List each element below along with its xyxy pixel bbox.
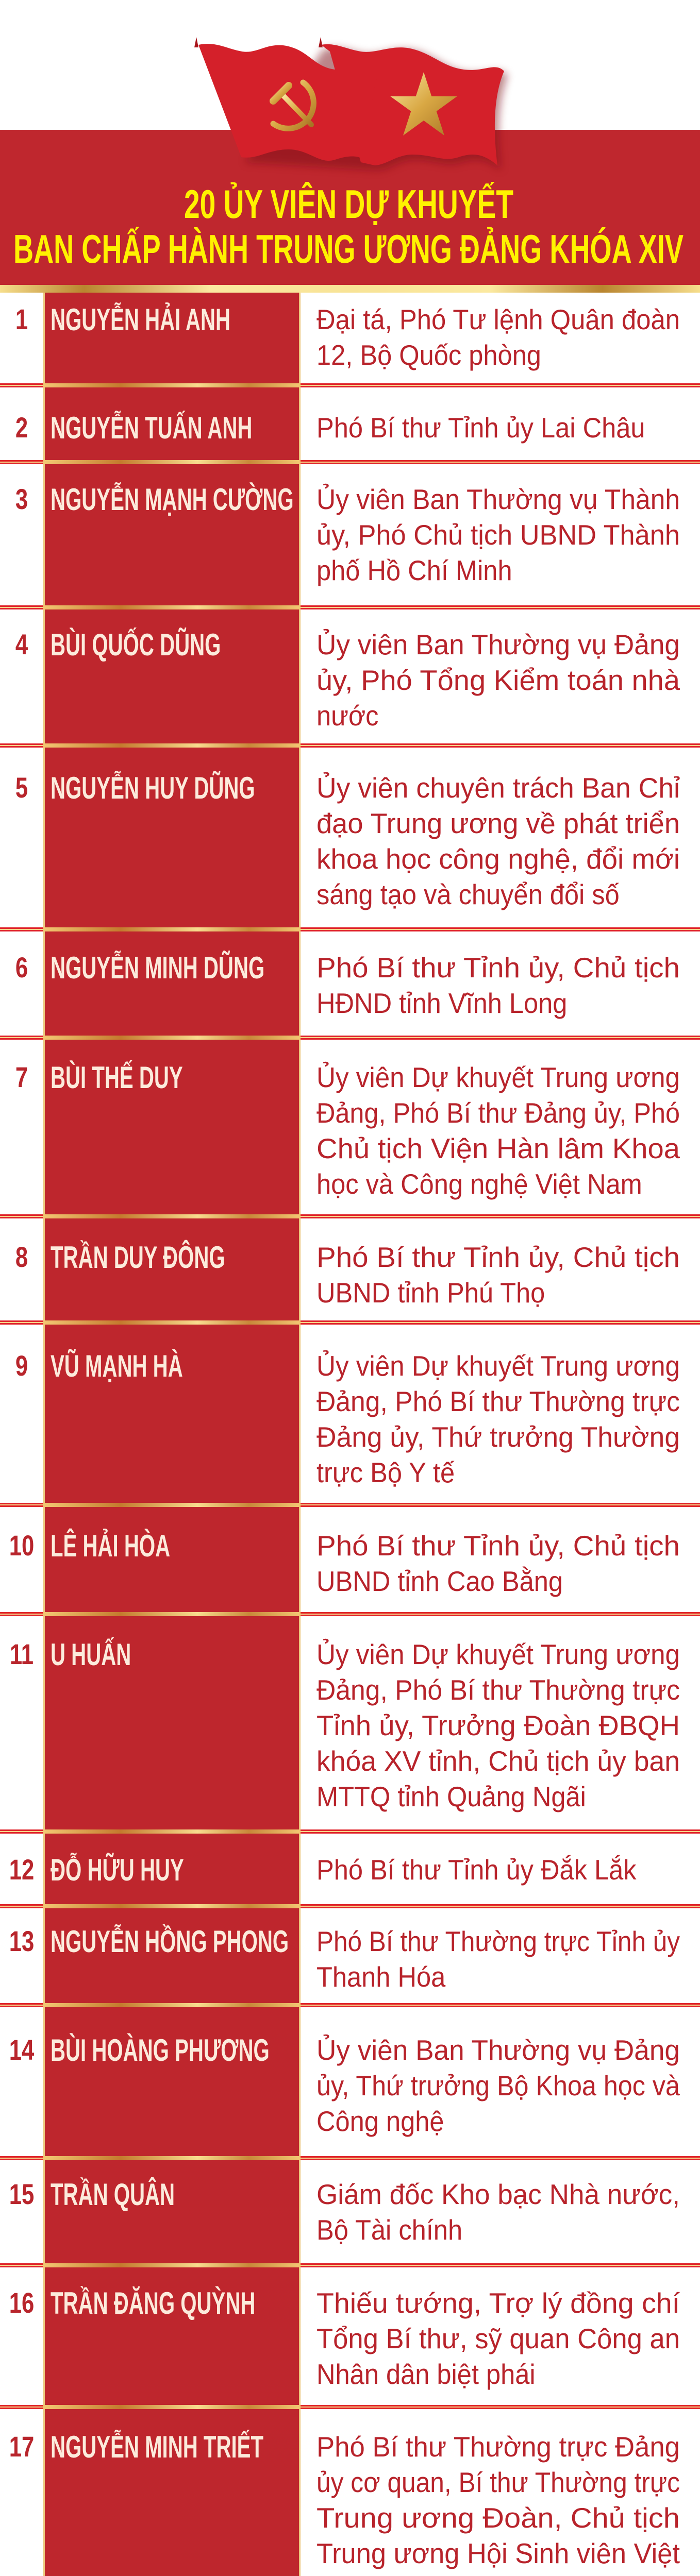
description 8: Phó Bí thư Tỉnh ủy, Chủ tịch xyxy=(316,1241,680,1273)
row 2 xyxy=(15,410,645,445)
number 10: 10 xyxy=(9,1530,34,1562)
description 9: Đảng, Phó Bí thư Thường trực xyxy=(316,1385,680,1417)
row 4 xyxy=(15,627,680,732)
description 16: Thiếu tướng, Trợ lý đồng chí xyxy=(316,2287,680,2319)
row 7 xyxy=(15,1060,680,1200)
description 7 xyxy=(316,1061,680,1200)
number 13: 13 xyxy=(9,1925,34,1957)
description 15: Giám đốc Kho bạc Nhà nước, xyxy=(316,2178,680,2210)
description 10 xyxy=(316,1530,680,1597)
description 3: phố Hồ Chí Minh xyxy=(316,555,512,586)
description 11: khóa XV tỉnh, Chủ tịch ủy ban xyxy=(316,1745,680,1777)
description 3: Ủy viên Ban Thường vụ Thành xyxy=(316,483,680,515)
description 5 xyxy=(316,772,680,910)
right flag (Vietnam) xyxy=(319,37,504,165)
description 14 xyxy=(316,2034,680,2137)
description 6: Phó Bí thư Tỉnh ủy, Chủ tịch xyxy=(316,952,680,984)
description 16 xyxy=(316,2287,680,2390)
description 11 xyxy=(316,1638,680,1812)
description 7: Ủy viên Dự khuyết Trung ương xyxy=(316,1061,680,1093)
row 3 xyxy=(15,482,680,586)
description 3: ủy, Phó Chủ tịch UBND Thành xyxy=(316,519,680,551)
description 2: Phó Bí thư Tỉnh ủy Lai Châu xyxy=(316,412,645,444)
title xyxy=(13,181,684,272)
description 10: Phó Bí thư Tỉnh ủy, Chủ tịch xyxy=(316,1530,680,1562)
name 7: BÙI THẾ DUY xyxy=(51,1060,183,1095)
description 4: Ủy viên Ban Thường vụ Đảng xyxy=(316,629,680,660)
number 6: 6 xyxy=(15,952,28,984)
number 16: 16 xyxy=(9,2287,34,2319)
number 12: 12 xyxy=(9,1854,34,1886)
number 15: 15 xyxy=(9,2178,34,2210)
row 17 xyxy=(9,2429,680,2576)
name 17: NGUYỄN MINH TRIẾT xyxy=(51,2429,263,2464)
name 3: NGUYỄN MẠNH CƯỜNG xyxy=(51,482,294,517)
description 1 xyxy=(316,303,680,371)
number 4: 4 xyxy=(15,629,28,660)
description 6 xyxy=(316,952,680,1019)
row 15 xyxy=(9,2177,680,2246)
name 4: BÙI QUỐC DŨNG xyxy=(51,627,221,662)
description 6: HĐND tỉnh Vĩnh Long xyxy=(316,988,567,1019)
description 14: Công nghệ xyxy=(316,2106,444,2137)
number 2: 2 xyxy=(15,412,28,444)
number 17: 17 xyxy=(9,2431,34,2463)
title: 20 ỦY VIÊN DỰ KHUYẾT xyxy=(184,181,513,227)
name column background xyxy=(43,293,301,2576)
name 15: TRẦN QUÂN xyxy=(51,2177,175,2212)
name 13: NGUYỄN HỒNG PHONG xyxy=(51,1924,289,1959)
description 9: Đảng ủy, Thứ trưởng Thường xyxy=(316,1421,680,1453)
description 16: Tổng Bí thư, sỹ quan Công an xyxy=(316,2323,680,2354)
description 8: UBND tỉnh Phú Thọ xyxy=(316,1277,545,1309)
description 3 xyxy=(316,483,680,586)
description 4: nước xyxy=(316,700,378,732)
description 9: Ủy viên Dự khuyết Trung ương xyxy=(316,1350,680,1382)
header red band xyxy=(0,130,700,285)
description 5: đạo Trung ương về phát triển xyxy=(316,807,680,839)
row 10 xyxy=(9,1528,680,1597)
name 10: LÊ HẢI HÒA xyxy=(51,1528,170,1563)
description 5: sáng tạo và chuyển đổi số xyxy=(316,879,620,910)
row 6 xyxy=(15,950,680,1019)
number 1: 1 xyxy=(15,303,28,335)
description 17 xyxy=(316,2431,680,2576)
name 6: NGUYỄN MINH DŨNG xyxy=(51,950,264,985)
description 10: UBND tỉnh Cao Bằng xyxy=(316,1566,563,1597)
flags illustration xyxy=(194,37,508,170)
name 5: NGUYỄN HUY DŨNG xyxy=(51,770,255,805)
row 13 xyxy=(9,1924,680,1993)
description 12: Phó Bí thư Tỉnh ủy Đắk Lắk xyxy=(316,1854,637,1886)
number 11: 11 xyxy=(10,1638,34,1670)
name 11: U HUẤN xyxy=(51,1637,131,1672)
description 16: Nhân dân biệt phái xyxy=(316,2359,536,2390)
number 9: 9 xyxy=(15,1350,28,1382)
left flag (Party) xyxy=(194,37,379,165)
description 5: Ủy viên chuyên trách Ban Chỉ xyxy=(316,772,680,804)
row 11 xyxy=(10,1637,680,1812)
description 4: ủy, Phó Tổng Kiểm toán nhà xyxy=(316,664,680,696)
number 14: 14 xyxy=(9,2034,34,2066)
row 14 xyxy=(9,2033,680,2137)
description 5: khoa học công nghệ, đổi mới xyxy=(316,843,680,875)
description 15 xyxy=(316,2178,680,2246)
number 7: 7 xyxy=(15,1061,28,1093)
description 8 xyxy=(316,1241,680,1309)
row 16 xyxy=(9,2285,680,2390)
name 12: ĐỖ HỮU HUY xyxy=(51,1852,184,1887)
description 11: MTTQ tỉnh Quảng Ngãi xyxy=(316,1781,586,1812)
row 1 xyxy=(15,302,680,371)
description 11: Đảng, Phó Bí thư Thường trực xyxy=(316,1674,680,1706)
row 5 xyxy=(15,770,680,910)
row 8 xyxy=(15,1240,680,1309)
description 1: 12, Bộ Quốc phòng xyxy=(316,340,541,371)
description 7: Chủ tịch Viện Hàn lâm Khoa xyxy=(316,1132,680,1164)
description 11: Tỉnh ủy, Trưởng Đoàn ĐBQH xyxy=(316,1709,680,1741)
description 17: Trung ương Hội Sinh viên Việt xyxy=(316,2537,680,2569)
name 2: NGUYỄN TUẤN ANH xyxy=(51,410,252,445)
description 17: Trung ương Đoàn, Chủ tịch xyxy=(316,2502,680,2534)
number 5: 5 xyxy=(15,772,28,804)
description 4 xyxy=(316,629,680,732)
description 13: Thanh Hóa xyxy=(316,1961,446,1993)
description 9 xyxy=(316,1350,680,1488)
row 9 xyxy=(15,1348,680,1488)
name 16: TRẦN ĐĂNG QUỲNH xyxy=(51,2285,255,2320)
description 15: Bộ Tài chính xyxy=(316,2214,462,2246)
description 1: Đại tá, Phó Tư lệnh Quân đoàn xyxy=(316,303,680,335)
name 8: TRẦN DUY ĐÔNG xyxy=(51,1240,225,1275)
name 14: BÙI HOÀNG PHƯƠNG xyxy=(51,2033,270,2067)
name 1: NGUYỄN HẢI ANH xyxy=(51,302,230,337)
description 7: học và Công nghệ Việt Nam xyxy=(316,1168,642,1200)
description 13 xyxy=(316,1925,680,1993)
description 9: trực Bộ Y tế xyxy=(316,1457,455,1488)
icon: hammer and sickle xyxy=(273,82,313,128)
number 8: 8 xyxy=(15,1241,28,1273)
description 17: Phó Bí thư Thường trực Đảng xyxy=(316,2431,680,2463)
name 9: VŨ MẠNH HÀ xyxy=(51,1348,183,1383)
row 12 xyxy=(9,1852,637,1887)
description 14: Ủy viên Ban Thường vụ Đảng xyxy=(316,2034,680,2066)
description 11: Ủy viên Dự khuyết Trung ương xyxy=(316,1638,680,1670)
gold divider under header xyxy=(0,285,700,293)
number 3: 3 xyxy=(15,483,28,515)
icon: gold star xyxy=(390,72,457,135)
